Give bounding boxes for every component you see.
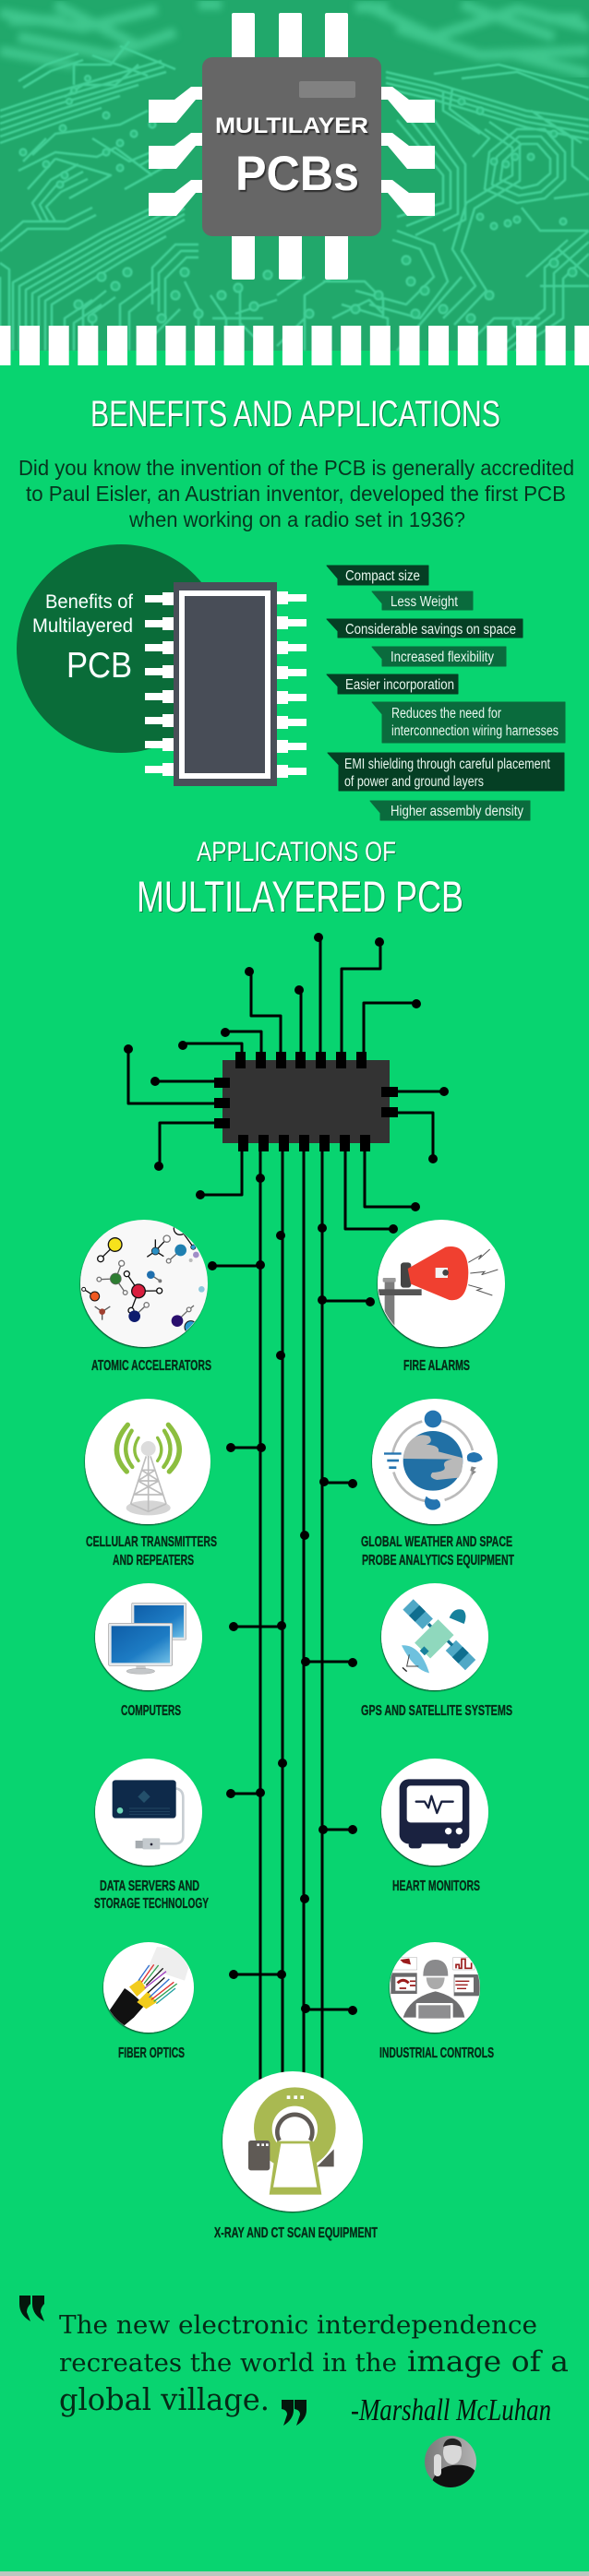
- label: [361, 1534, 514, 1568]
- tag: increased flexibility: Increased flexibility: [391, 650, 494, 665]
- tag: EMI shielding: [328, 753, 564, 791]
- tag: reduces wiring harnesses: Reduces the need for: [391, 706, 501, 722]
- IC pins: [145, 591, 307, 778]
- application: global weather and space probe analytics: [361, 1399, 514, 1568]
- circuit diagram: [124, 933, 449, 2085]
- tag: higher assembly density: Higher assembly density: [391, 804, 523, 819]
- label: GPS AND SATELLITE SYSTEMS: [361, 1703, 512, 1719]
- tag: compact size: Compact size: [345, 568, 420, 584]
- tag: EMI shielding: of power and ground layers: [344, 774, 484, 790]
- multilayered label: Multilayered: [32, 615, 133, 637]
- traces: [128, 937, 444, 2085]
- icon: closing quote mark: [282, 2400, 307, 2426]
- application: cellular transmitters and repeaters: [85, 1399, 217, 1568]
- application: computers: [95, 1583, 202, 1719]
- label: [86, 1534, 217, 1568]
- label: PROBE ANALYTICS EQUIPMENT: [362, 1553, 514, 1568]
- panel: benefits of multilayered PCB: [17, 544, 307, 786]
- benefits label: Benefits of: [45, 591, 133, 613]
- icon: satellite: [402, 1599, 475, 1673]
- icon: CT scanner: [248, 2087, 336, 2195]
- intro paragraph: [18, 456, 574, 531]
- junction dots: [124, 933, 449, 2015]
- tag: increased flexibility: [372, 647, 506, 666]
- label: HEART MONITORS: [392, 1878, 480, 1894]
- header banner: [0, 0, 589, 365]
- intro paragraph: when working on a radio set in 1936?: [128, 507, 465, 531]
- chip pads: [214, 1052, 398, 1151]
- tag: easier incorporation: Easier incorporation: [345, 677, 454, 693]
- application: atomic accelerators: [80, 1220, 211, 1374]
- quote text: image of a: [407, 2345, 569, 2379]
- application: fire alarms: [378, 1220, 505, 1374]
- bottom edge strip: [0, 2571, 589, 2576]
- central chip: [222, 1060, 390, 1143]
- label: FIRE ALARMS: [403, 1358, 470, 1374]
- label: CELLULAR TRANSMITTERS: [86, 1534, 217, 1550]
- IC white frame: [182, 593, 268, 776]
- icon: molecules: [82, 1222, 205, 1333]
- tag: less weight: [372, 591, 473, 610]
- label: AND REPEATERS: [113, 1553, 194, 1568]
- icon: weather globe: [384, 1411, 483, 1510]
- application: GPS and satellite systems: [361, 1583, 512, 1719]
- chip body: [202, 57, 381, 236]
- icon: radio tower: [116, 1425, 179, 1515]
- tag: reduces wiring harnesses: [372, 702, 565, 743]
- application: x-ray and CT scan equipment: [214, 2071, 378, 2241]
- application: data servers and storage technology: [94, 1759, 209, 1912]
- portrait: [425, 2436, 476, 2487]
- benefit tags: [327, 566, 565, 820]
- label: X-RAY AND CT SCAN EQUIPMENT: [214, 2225, 378, 2241]
- comb stripes: [0, 326, 589, 365]
- tag: less weight: Less Weight: [391, 594, 459, 610]
- application: heart monitors: [381, 1759, 488, 1894]
- PCB label: PCB: [66, 646, 132, 686]
- title: PCBs: PCBs: [235, 147, 359, 201]
- icon: heart monitor: [400, 1779, 469, 1848]
- icon: external drive: [113, 1780, 183, 1849]
- circuit board background: [0, 0, 589, 351]
- dark green circle: [17, 544, 225, 753]
- label: GLOBAL WEATHER AND SPACE: [361, 1534, 512, 1550]
- quote text: recreates the world in the: [59, 2349, 397, 2378]
- label: INDUSTRIAL CONTROLS: [379, 2045, 494, 2061]
- label: FIBER OPTICS: [118, 2045, 185, 2061]
- tag: easier incorporation: [327, 674, 458, 694]
- intro paragraph: to Paul Eisler, an Austrian inventor, developed the first PCB: [26, 482, 566, 506]
- chip pins: [149, 13, 435, 280]
- icon: two monitors: [109, 1603, 186, 1674]
- icon: siren horn: [379, 1246, 499, 1326]
- label: STORAGE TECHNOLOGY: [94, 1896, 209, 1912]
- tag: savings on space: Considerable savings on space: [345, 622, 516, 638]
- IC body: [174, 582, 277, 786]
- icon: operator with screens: [391, 1958, 480, 2019]
- label: ATOMIC ACCELERATORS: [91, 1358, 211, 1374]
- application: fiber optics: [103, 1942, 194, 2061]
- application: industrial controls: [379, 1942, 494, 2061]
- icon: opening quote mark: [19, 2296, 44, 2321]
- quote text: global village.: [59, 2381, 270, 2417]
- label: DATA SERVERS AND: [100, 1878, 199, 1894]
- tag: higher assembly density: [370, 801, 530, 820]
- quote text: The new electronic interdependence: [59, 2311, 537, 2340]
- heading: applications of: APPLICATIONS OF: [197, 837, 396, 867]
- chip notch label: [299, 81, 355, 98]
- label: [94, 1878, 209, 1912]
- quote text: [59, 2311, 569, 2417]
- tag: compact size: [327, 566, 428, 585]
- label: COMPUTERS: [121, 1703, 181, 1719]
- quote section: [19, 2296, 569, 2491]
- heading: multilayered PCB: MULTILAYERED PCB: [137, 872, 463, 921]
- title: multilayer: MULTILAYER: [215, 113, 368, 138]
- icon: fiber optic cable: [109, 1947, 188, 2026]
